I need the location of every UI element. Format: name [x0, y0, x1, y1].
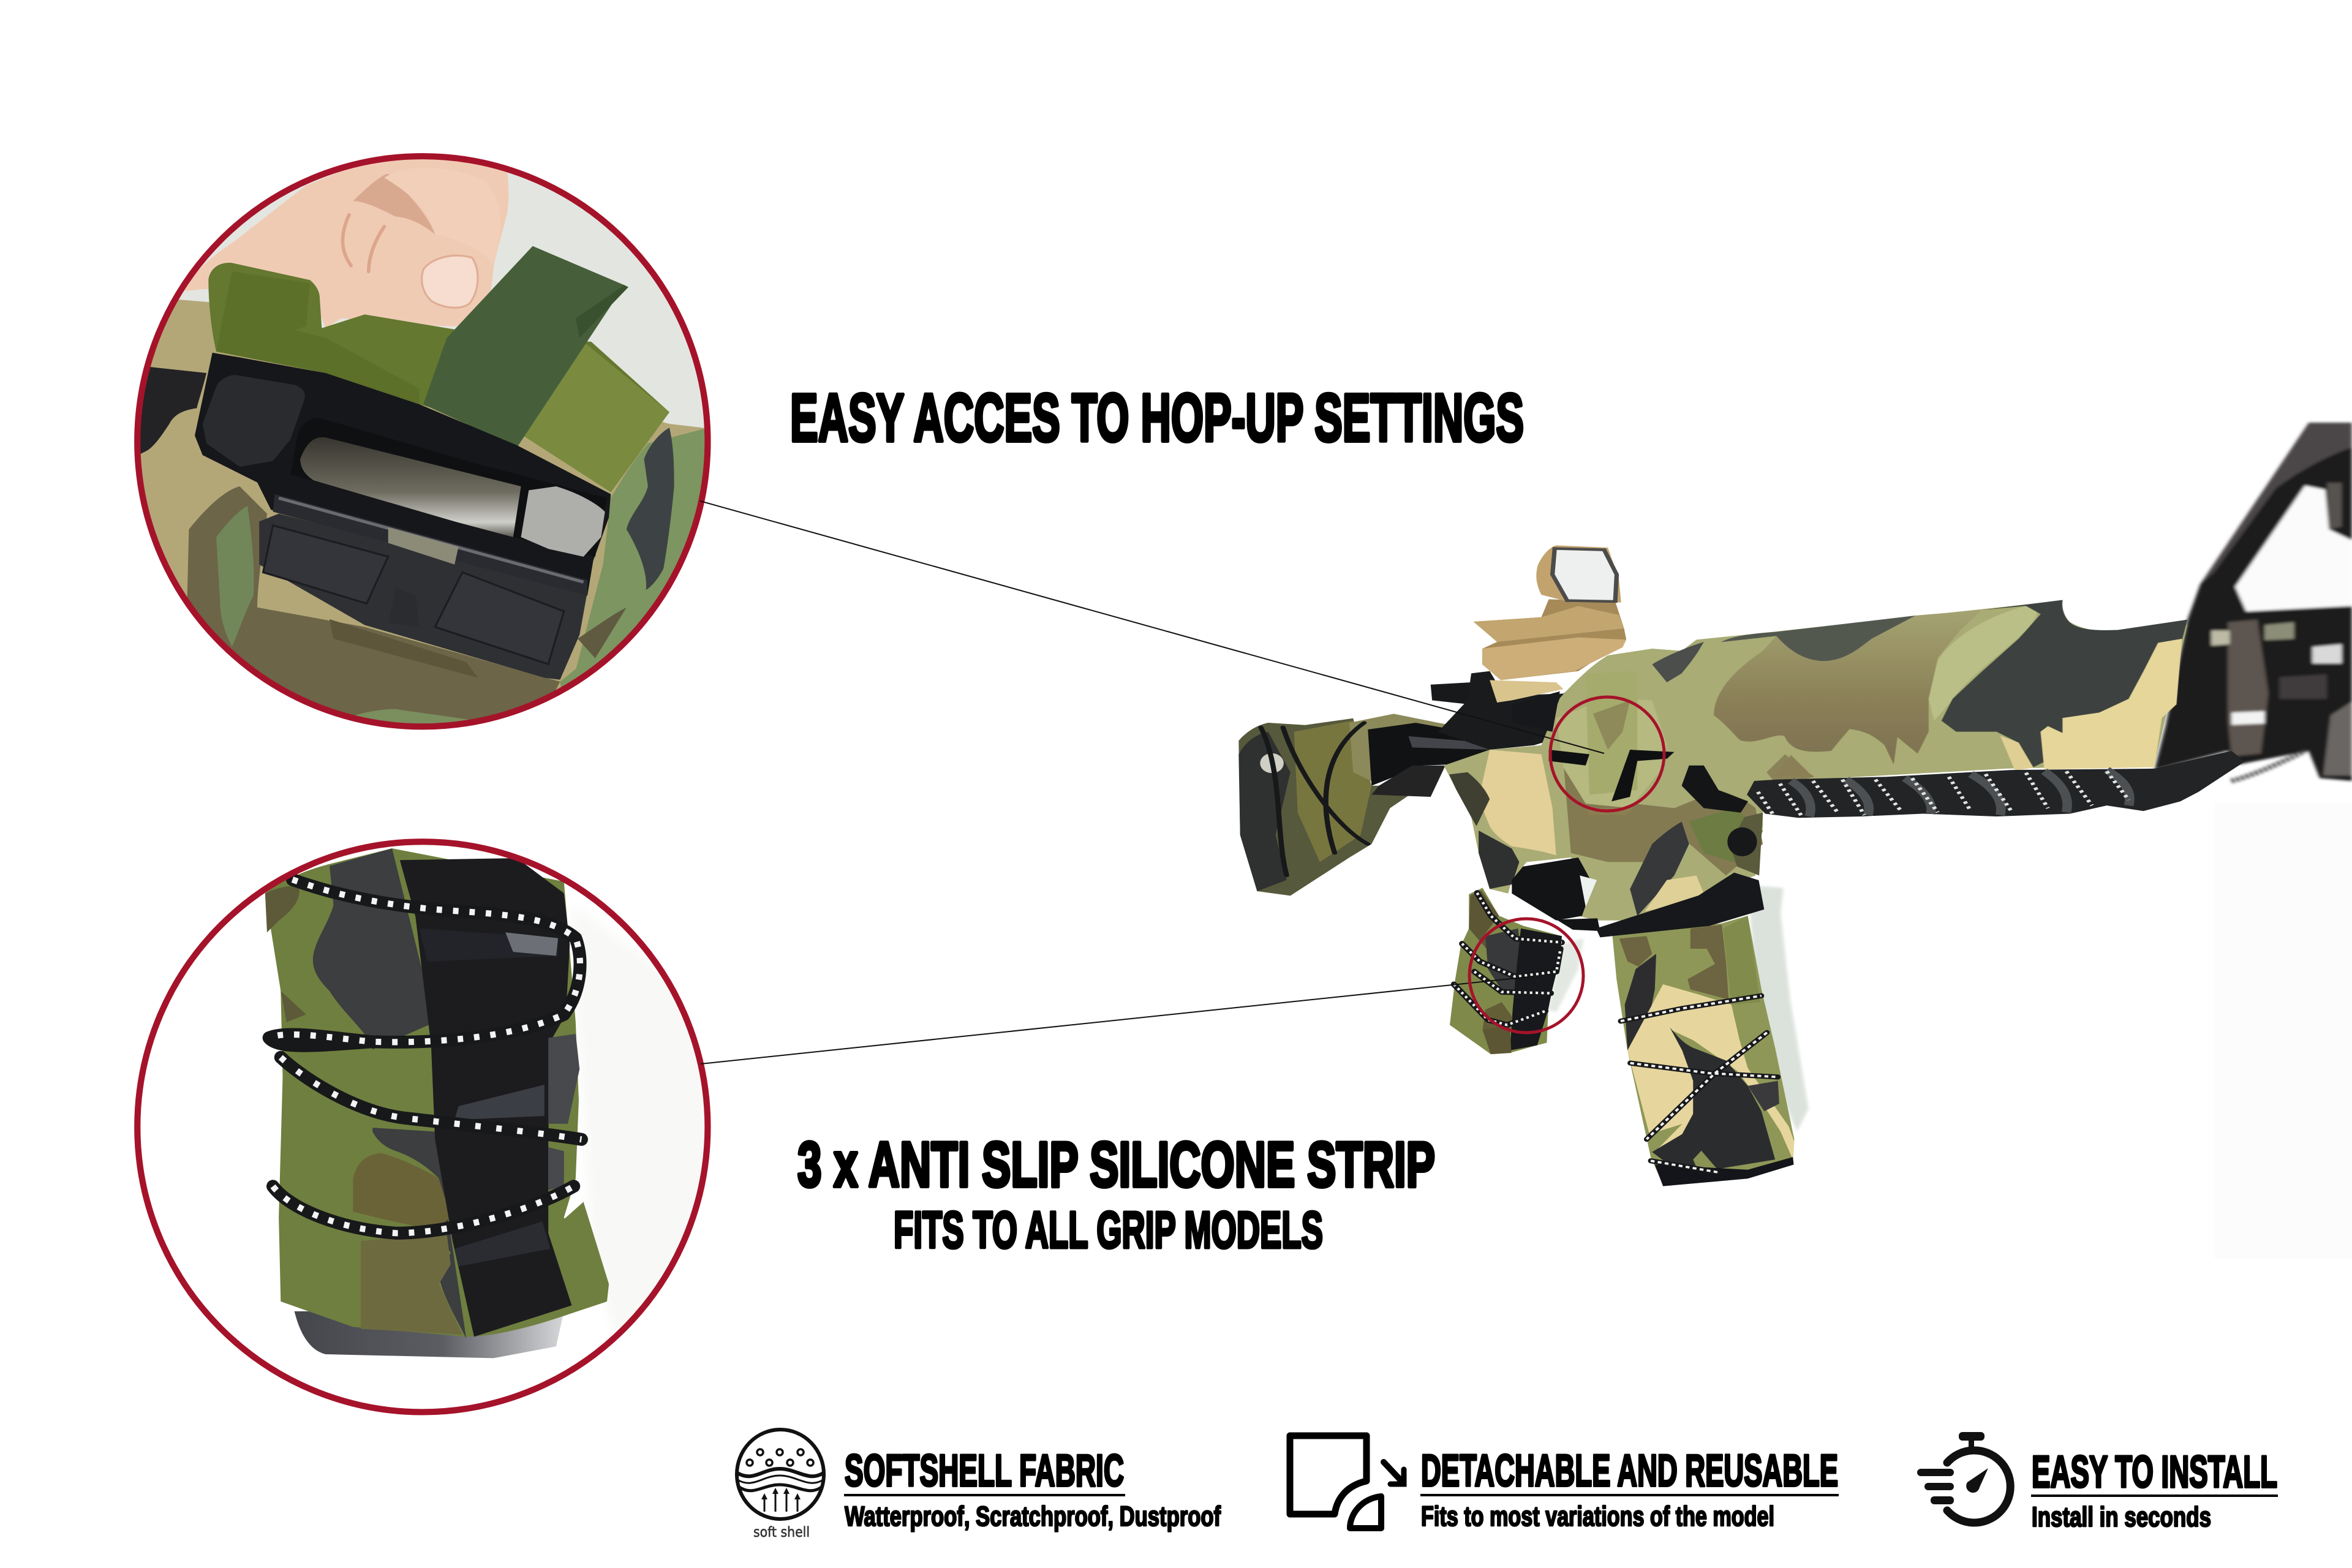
- grip: [1450, 888, 1562, 1054]
- handguard camo, stretched front section: [1714, 600, 2187, 777]
- heading: anti slip strip: 3 x ANTI SLIP SILICONE STRIP: [797, 1129, 1435, 1200]
- cast shadow: [1548, 875, 1809, 1132]
- title: SOFTSHELL FABRIC: [845, 1446, 1124, 1496]
- optic frame: [1536, 545, 1621, 602]
- description: Watterproof, Scratchproof, Dustproof: [845, 1501, 1221, 1532]
- camo: grey top patch: [1721, 616, 1916, 661]
- spring: [388, 527, 459, 565]
- charging handle: [1431, 682, 1474, 705]
- hand: [185, 146, 508, 328]
- fabric panel over ejection port: [1556, 698, 1667, 808]
- receiver: [195, 353, 611, 596]
- camo: dark on lower: [1449, 772, 1490, 826]
- hop-up chamber: [521, 486, 605, 557]
- cord fringe under handguard: [1747, 751, 2244, 818]
- camo: light green streak: [1929, 606, 2037, 721]
- description: Install in seconds: [2032, 1501, 2211, 1532]
- icon: stopwatch: [1917, 1432, 2010, 1523]
- feature: detachable and reusable: [1290, 1436, 1839, 1532]
- velcro fleece strap: [208, 263, 669, 492]
- black mesh: [400, 858, 571, 1336]
- camo: greys: [1652, 642, 1704, 682]
- cord strips: [269, 880, 580, 1046]
- camo: dark patch: [1942, 600, 2187, 767]
- grip and magazine: [1450, 873, 1794, 1186]
- optic riser: [1474, 599, 1626, 680]
- ring: [137, 842, 707, 1412]
- locator ring: hop-up: [1550, 697, 1664, 811]
- leader line: hop-up: [700, 501, 1604, 753]
- optic base: [1474, 606, 1624, 642]
- silicone strip: [420, 929, 558, 962]
- mag well: [1596, 873, 1764, 937]
- title: DETACHABLE AND REUSABLE: [1421, 1446, 1838, 1496]
- heading: hop-up: EASY ACCES TO HOP-UP SETTINGS: [790, 380, 1524, 456]
- inset photo: hop-up access: [134, 153, 711, 730]
- leader line: grip: [701, 976, 1534, 1064]
- feature: easy to install: [1917, 1432, 2278, 1532]
- mag cords: [1621, 996, 1778, 1172]
- icon: detachable corner: [1290, 1436, 1404, 1528]
- rear receiver: [1438, 655, 1608, 750]
- front sight and barrel end: [2154, 423, 2352, 781]
- body: [1444, 601, 2187, 921]
- lower flap: [1730, 813, 1763, 875]
- velcro loop strap: [423, 246, 625, 447]
- inset photo: grip cord: [134, 839, 711, 1415]
- stock: [1238, 718, 1423, 895]
- camo: tan patch: [2041, 639, 2182, 769]
- fabric olive: [265, 848, 609, 1336]
- camo: tan: [1479, 750, 1556, 855]
- cords: [1261, 723, 1368, 875]
- pivot: [1682, 766, 1748, 813]
- icon: soft shell: [737, 1430, 824, 1540]
- plastic base: [295, 1311, 564, 1358]
- dust cover: [259, 514, 587, 680]
- magazine: [1613, 916, 1794, 1185]
- camo dark grey: [313, 848, 466, 1339]
- stock, receiver and handguard, drawn in stretched coordinates: [1238, 545, 2187, 921]
- main photo: camouflaged rifle: [1238, 423, 2352, 1186]
- trigger guard plate: [1556, 918, 1600, 931]
- camo: brown patch: [1714, 610, 1982, 764]
- description: Fits to most variations of the model: [1421, 1501, 1774, 1532]
- grip cords: [1454, 893, 1562, 1025]
- camo: brown: [1564, 763, 1763, 875]
- icon: soft shell: soft shell: [753, 1525, 810, 1540]
- tube: [1368, 723, 1490, 786]
- base plate: [1655, 1157, 1794, 1186]
- thumb nail: [422, 255, 478, 307]
- feature: softshell fabric: [737, 1430, 1221, 1540]
- locator ring: grip: [1469, 919, 1583, 1033]
- ring: [137, 156, 707, 726]
- trigger well: [1512, 858, 1593, 921]
- subheading: fits all grips: FITS TO ALL GRIP MODELS: [894, 1201, 1323, 1259]
- chamber cylinder: [300, 437, 521, 537]
